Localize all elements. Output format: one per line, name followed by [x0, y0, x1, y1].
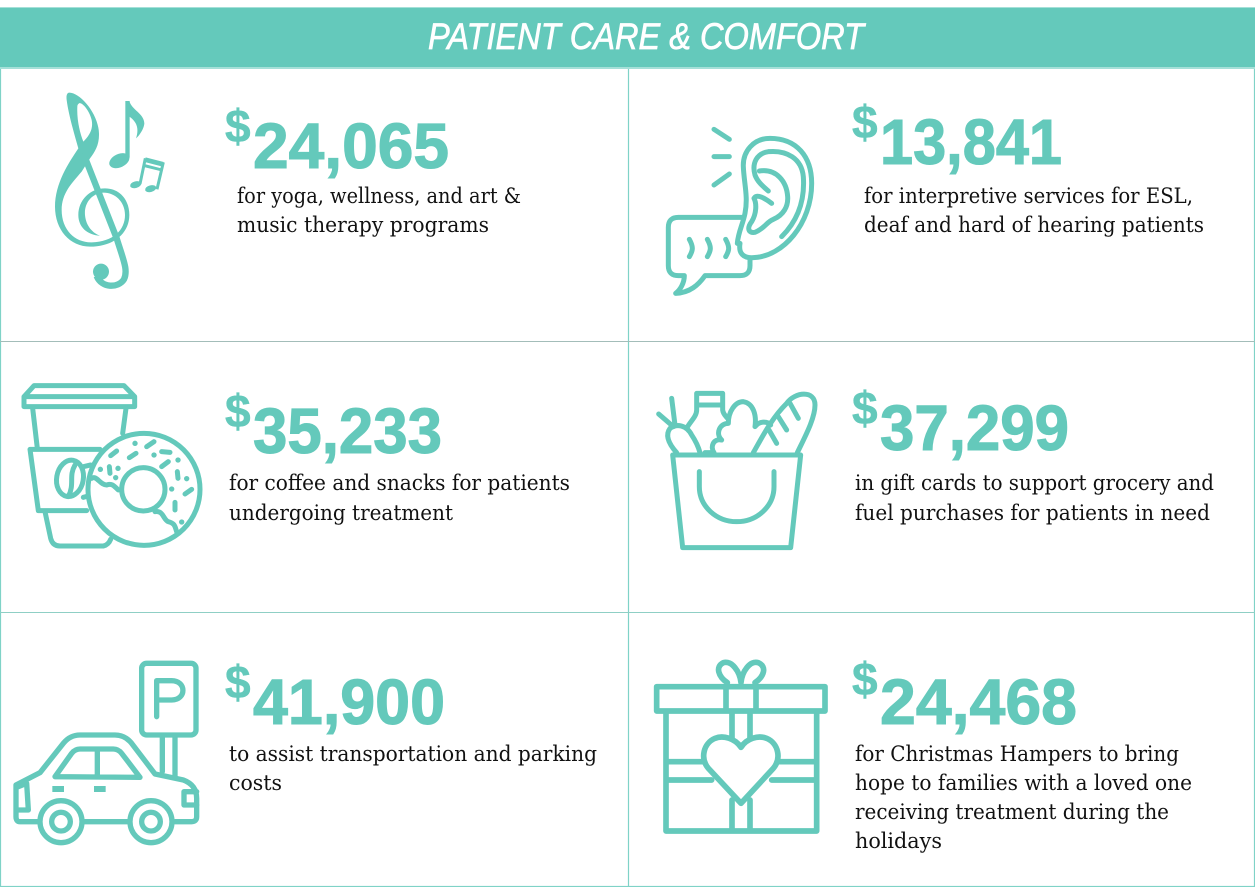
amount: $41,900: $	[225, 656, 251, 708]
icon: coffee cup and donut	[24, 386, 200, 546]
panel: Christmas hampers	[657, 653, 1192, 853]
amount: $41,900: 41,900	[253, 666, 445, 738]
amount: $24,468: 24,468	[880, 666, 1077, 738]
description: Christmas hampers: hope to families with a loved one	[855, 771, 1192, 795]
panel: yoga, wellness and music therapy	[55, 93, 521, 286]
panel: coffee and snacks	[24, 385, 570, 546]
title banner	[0, 7, 1255, 69]
description: Christmas hampers: for Christmas Hampers to bring	[855, 742, 1179, 766]
description: transportation and parking	[229, 742, 597, 795]
description: yoga, wellness: music therapy programs	[237, 213, 489, 237]
amount: $13,841: $	[852, 96, 878, 148]
description: yoga, wellness: for yoga, wellness, and art &	[237, 184, 521, 208]
description: gift cards: fuel purchases for patients in need	[855, 501, 1210, 525]
description: interpretive services: deaf and hard of hearing patients	[864, 213, 1204, 237]
icon: car and parking sign	[16, 663, 197, 843]
amount: $35,233: $	[225, 385, 251, 437]
description: interpretive services: for interpretive services for ESL,	[864, 184, 1193, 208]
panel: interpretive services	[668, 96, 1204, 293]
description: Christmas hampers: receiving treatment during the	[855, 800, 1169, 824]
description: interpretive services	[864, 184, 1204, 237]
description: coffee and snacks: undergoing treatment	[229, 501, 454, 525]
description: transportation and parking: costs	[229, 771, 282, 795]
description: coffee and snacks: for coffee and snacks for patients	[229, 471, 570, 495]
amount: $24,468: $	[852, 653, 878, 705]
amount: $13,841: 13,841	[880, 106, 1062, 178]
icon: treble clef and music notes	[55, 93, 164, 286]
description: Christmas hampers	[855, 742, 1192, 853]
description: coffee and snacks	[229, 471, 570, 525]
amount: $24,065: 24,065	[253, 110, 449, 182]
panel: transportation and parking	[16, 656, 597, 843]
amount: $35,233: 35,233	[253, 395, 442, 467]
amount: $37,299: $	[852, 382, 878, 434]
amount: $24,065: $	[225, 100, 251, 152]
amount: $37,299: 37,299	[880, 392, 1069, 464]
panel: gift cards	[659, 382, 1214, 548]
description: Christmas hampers: holidays	[855, 829, 942, 853]
description: gift cards: in gift cards to support grocery and	[855, 471, 1214, 495]
icon: ear and speech bubble	[668, 129, 812, 293]
description: gift cards	[855, 471, 1214, 525]
icon: grocery bag	[659, 393, 815, 548]
description: yoga, wellness	[237, 184, 521, 237]
icon: gift box with heart	[657, 662, 825, 831]
title banner: PATIENT CARE & COMFORT	[428, 16, 866, 57]
description: transportation and parking: to assist transportation and parking	[229, 742, 597, 766]
